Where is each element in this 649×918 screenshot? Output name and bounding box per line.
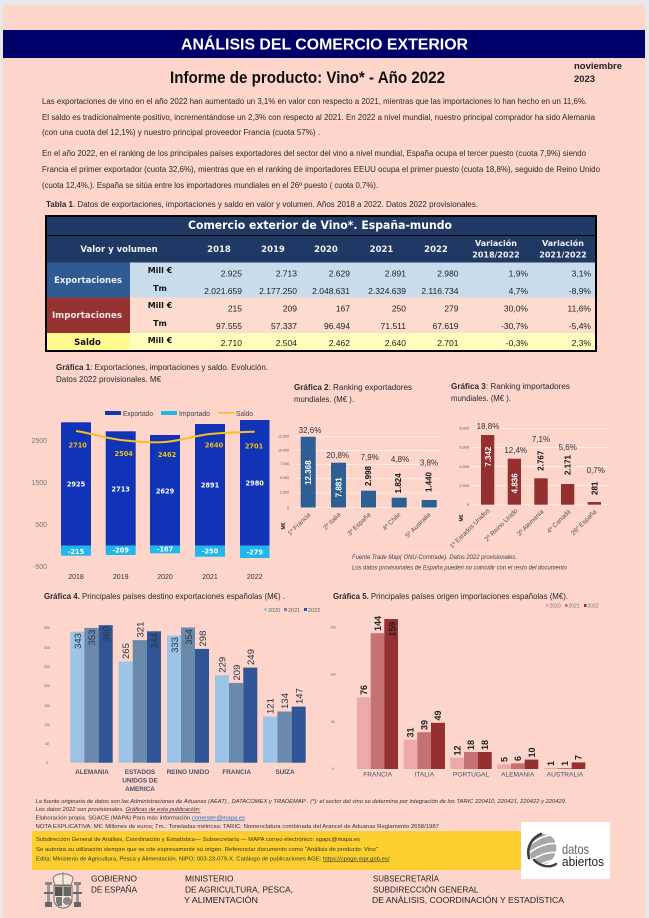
y axis: 2.500 (280, 490, 289, 494)
icon: coat of arms of Spain (44, 872, 82, 908)
value labels (359, 616, 584, 766)
y axis: 0 (467, 503, 469, 507)
value labels (73, 622, 306, 714)
y axis (44, 626, 50, 765)
y axis: 350 (44, 626, 50, 630)
value labels: 209 (232, 665, 243, 680)
category labels: ALEMANIA (75, 769, 109, 776)
table column headers: 2020 (314, 245, 338, 255)
chart 1 title (56, 363, 268, 384)
table row labels: Saldo (74, 338, 101, 348)
y axis: 4.000 (459, 465, 469, 469)
x axis years: 2021 (202, 574, 218, 581)
export labels: 2629 (156, 488, 175, 496)
legend: 2020 (268, 608, 280, 614)
footer: ministerio: DE AGRICULTURA, PESCA, (185, 884, 293, 894)
category labels (75, 769, 295, 793)
date: noviembre (574, 61, 622, 72)
legend (546, 604, 599, 610)
value labels: 134 (280, 693, 291, 709)
value labels: 7.342 (484, 446, 493, 467)
export labels: 2713 (112, 486, 130, 494)
balance labels (69, 442, 264, 459)
logo: datos abiertos (521, 822, 610, 879)
category labels: SUIZA (275, 769, 295, 776)
x axis years: 2018 (68, 574, 84, 581)
sources and notes: Elaboración propia. SGACE (MAPA) Para más información comester@mapa.es (36, 816, 245, 822)
footer: gobierno (91, 874, 137, 894)
balance labels: 2701 (245, 442, 264, 450)
y axis: 300 (44, 646, 50, 650)
footer: gobierno: GOBIERNO (91, 874, 137, 884)
y axis: 6.000 (459, 446, 469, 450)
chart 1 title: Datos 2022 provisionales. M€ (56, 375, 162, 384)
category labels: 2º Reino Unido (484, 507, 520, 543)
value labels: 343 (73, 633, 84, 649)
chart 3 title (451, 382, 570, 403)
value labels: 321 (136, 622, 146, 638)
value labels: 265 (121, 643, 132, 659)
credits box: Se autoriza su utilización siempre que se cite expresamente su origen. Referenciar documento como "Análisis de producto: Vino" (36, 847, 378, 853)
share labels: 18,8% (477, 422, 499, 431)
table values: -8,9% (569, 286, 591, 296)
category labels: UNIDOS DE (122, 778, 158, 784)
table row labels: Mill € (148, 266, 173, 275)
table column headers: 2021/2022 (539, 250, 587, 260)
intro paragraph 2: (cuota 12,4%,). España se sitúa entre los importadores mundiales en el 26º puesto ( cuota 0,7%). (42, 181, 378, 190)
value labels: 249 (246, 649, 257, 665)
y axis (278, 434, 289, 510)
legend: 2021 (568, 604, 580, 610)
bars 2022 (384, 619, 585, 769)
unit: M€ (281, 522, 287, 529)
category labels: AMERICA (125, 786, 155, 793)
share labels: 7,1% (532, 435, 550, 444)
table column headers: Variación (475, 238, 517, 248)
y axis: 0 (46, 761, 48, 765)
x axis years: 2019 (113, 574, 129, 581)
table row labels: Tm (153, 319, 167, 328)
table values: 215 (228, 304, 242, 314)
table column headers (80, 238, 587, 260)
value labels: 7.881 (334, 477, 344, 497)
table column headers: Variación (542, 238, 584, 248)
report heading: Informe de producto: Vino* - Año 2022 (170, 69, 445, 87)
balance labels: 2640 (205, 442, 224, 450)
x axis years (68, 574, 263, 581)
footer: subsecretaría: DE ANÁLISIS, COORDINACIÓN Y ESTADÍSTICA (372, 895, 564, 905)
value labels: 354 (184, 629, 195, 645)
table row labels: Tm (153, 284, 167, 293)
footer: ministerio: MINISTERIO (185, 874, 234, 884)
table values: 2.324.639 (368, 286, 406, 296)
chart 2 title: Gráfica 2: Ranking exportadores (294, 383, 412, 392)
value labels: 333 (170, 637, 181, 653)
chart 1: exports, imports and balance (31, 411, 270, 581)
table row labels (52, 266, 173, 348)
logo: datos abiertos: abiertos (562, 854, 604, 869)
table values: 2.980 (437, 268, 459, 278)
value labels: 360 (102, 626, 112, 642)
value labels (484, 446, 600, 495)
table values: 167 (336, 304, 350, 314)
x axis years: 2020 (157, 574, 173, 581)
source note: Fuente Trade Map( ONU-Comtrade). Datos 2022 provisionales. (352, 555, 517, 561)
y axis: 7.500 (280, 462, 289, 466)
y axis: 250 (44, 665, 50, 669)
table values: 96.494 (324, 321, 350, 331)
chart 1 title: Gráfica 1: Exportaciones, importaciones y saldo. Evolución. (56, 363, 268, 372)
footer: gobierno: DE ESPAÑA (91, 884, 137, 894)
intro paragraph 2 (42, 149, 601, 190)
chart 3 title: Gráfica 3: Ranking importadores (451, 382, 570, 391)
intro paragraph 2: Francia el primer exportador (cuota 32,6%), mientras que en el ranking de importadores EEUU ocupa el primer puesto (cuota 18,8%), seguido de Reino Unido (42, 165, 601, 174)
table column headers: Valor y volumen (80, 245, 158, 255)
y axis: 2.000 (459, 484, 469, 488)
table values: 2.504 (276, 338, 297, 348)
credits box: Subdirección General de Análisis, Coordinación y Estadística— Subsecretaría — MAPA correo electrónico: sgapc@mapa.es (36, 837, 360, 843)
y axis: 0 (332, 767, 334, 771)
value labels: 39 (420, 720, 430, 730)
chart 2 title (294, 383, 412, 404)
y axis: 5.000 (280, 476, 289, 480)
legend: Saldo (236, 411, 253, 418)
category labels: 4º Chile (381, 511, 403, 532)
table column headers: 2018/2022 (472, 250, 520, 260)
date: 2023 (574, 74, 595, 85)
value labels: 10 (527, 747, 537, 758)
share labels: 3,8% (420, 458, 438, 468)
table title: Comercio exterior de Vino*. España-mundo (188, 218, 452, 232)
icon: globe (525, 830, 561, 869)
table row labels: Mill € (148, 301, 173, 310)
share labels: 4,8% (391, 455, 409, 464)
value labels: 281 (590, 481, 600, 495)
table values: 4,7% (509, 286, 528, 296)
value labels: 2.767 (536, 450, 546, 471)
category labels: ALEMANIA (501, 772, 535, 778)
sources and notes: NOTA EXPLICATIVA: M€: Millones de euros; Tm.: Toneladas métricas; TARIC: Nomenclatura combinada del Arancel de Aduanas Reglamento 2658/1987 (36, 824, 439, 830)
credits box (32, 831, 522, 870)
table values: 250 (392, 304, 406, 314)
source note: Los datos provisionales de España pueden no coincidir con el resto del documento (352, 566, 568, 572)
share labels: 7,9% (361, 453, 379, 462)
chart 3: importers ranking (449, 422, 608, 550)
y axis: 150 (330, 626, 336, 630)
import labels: -167 (157, 546, 174, 554)
table: comercio exterior (45, 215, 597, 352)
export labels: 2891 (201, 482, 220, 490)
table values: 2.177.250 (259, 286, 297, 296)
y axis (330, 626, 336, 771)
table values: 2.021.659 (204, 286, 242, 296)
x axis years: 2022 (247, 574, 263, 581)
legend: 2021 (288, 608, 300, 614)
y axis: 200 (44, 684, 50, 688)
table column headers: 2021 (370, 245, 393, 255)
value labels: 298 (198, 631, 209, 646)
import labels (68, 546, 263, 556)
y axis: 2500 (31, 438, 47, 445)
chart 4: export destinations (44, 608, 320, 793)
y axis: 500 (35, 522, 47, 529)
chart 5 title: Gráfica 5. Principales países origen importaciones españolas (M€). (333, 592, 568, 601)
table values: 30,0% (504, 304, 528, 314)
footer: ministerio: Y ALIMENTACIÓN (184, 895, 258, 905)
legend: 2022 (588, 604, 599, 610)
value labels: 4.836 (510, 473, 520, 493)
value labels: 6 (513, 756, 523, 761)
footer: subsecretaría (372, 874, 564, 905)
value labels: 76 (359, 685, 369, 695)
bars 2020 (357, 697, 558, 769)
bars 2021 (371, 633, 572, 769)
category labels: 3º España (346, 511, 373, 538)
legend: 2020 (550, 604, 561, 610)
category labels: PORTUGAL (453, 772, 489, 778)
table column headers: 2018 (207, 245, 231, 255)
y axis (31, 438, 47, 571)
share labels: 5,6% (559, 443, 577, 452)
value labels: 144 (373, 616, 383, 631)
table values: 2.462 (329, 338, 350, 348)
table values (204, 268, 591, 348)
footer: subsecretaría: SUBSECRETARÍA (373, 874, 439, 884)
y axis: 0 (287, 506, 289, 510)
table values: -5,4% (569, 321, 591, 331)
value labels: 147 (294, 688, 306, 704)
value labels: 5 (500, 757, 510, 762)
value labels: 353 (87, 630, 98, 645)
category labels: AUSTRALIA (547, 772, 584, 778)
y axis (459, 426, 469, 507)
y axis: 1500 (31, 480, 47, 487)
table values: 2.701 (437, 338, 459, 348)
category labels: FRANCIA (363, 772, 393, 778)
import labels: -250 (202, 548, 219, 556)
category labels: 3º Alemania (516, 508, 546, 538)
value labels: 12 (452, 745, 462, 756)
table row labels: Exportaciones (54, 276, 122, 286)
chart 3 title: mundiales. (M€ ). (451, 394, 511, 403)
chart 5: import origins (330, 604, 599, 778)
table values: 209 (283, 304, 297, 314)
y axis: -500 (33, 564, 47, 571)
table values: 97.555 (216, 321, 242, 331)
table row labels: Mill € (148, 336, 173, 345)
bars 2022 (99, 625, 306, 763)
table values: 2.710 (221, 338, 242, 348)
category labels (363, 772, 584, 778)
category labels: 26º España (570, 508, 599, 537)
share labels (299, 426, 438, 468)
chart 2: exporters ranking (278, 426, 441, 540)
chart 4 title: Gráfica 4. Principales países destino exportaciones españolas (M€) . (44, 592, 285, 601)
share labels: 20,8% (326, 451, 349, 460)
table values: 1,9% (509, 268, 528, 278)
balance line (76, 431, 255, 442)
table column headers: 2022 (424, 245, 448, 255)
table values: -30,7% (501, 321, 528, 331)
table values: 2,3% (572, 338, 591, 348)
bars (301, 437, 437, 508)
footer: subsecretaría: SUBDIRECCIÓN GENERAL (373, 884, 479, 894)
y axis: 50 (45, 742, 49, 746)
value labels: 159 (388, 621, 398, 637)
value labels: 1 (546, 761, 556, 766)
category labels: ITALIA (414, 772, 435, 778)
value labels: 18 (466, 740, 476, 750)
value labels: 229 (218, 657, 228, 673)
value labels: 7 (574, 755, 584, 760)
category labels: 1º Estados Unidos (449, 507, 492, 550)
y axis: 8.000 (459, 426, 469, 430)
intro paragraph 1: Las exportaciones de vino en el año 2022 han aumentado un 3,1% en valor con respecto a 2021, mientras que las importaciones lo han hecho en un 11,6%. (42, 97, 587, 106)
value labels: 1 (560, 761, 570, 766)
export labels (67, 480, 264, 496)
intro paragraph 1 (42, 97, 596, 137)
category labels: FRANCIA (222, 769, 251, 776)
balance labels: 2710 (69, 442, 87, 450)
import labels: -215 (68, 548, 85, 556)
intro paragraph 2: En el año 2022, en el ranking de los principales países exportadores del sector del vino a nivel mundial, España ocupa el tercer puesto (cuota 7,9%) siendo (42, 149, 587, 158)
title banner: ANÁLISIS DEL COMERCIO EXTERIOR (181, 36, 468, 54)
share labels (477, 422, 605, 475)
bars 2021 (84, 628, 292, 763)
table values: 2.116.734 (421, 286, 459, 296)
export bars (61, 420, 270, 546)
y axis: 50 (331, 720, 335, 724)
source note (352, 555, 568, 572)
table values: 2.713 (276, 268, 297, 278)
share labels: 12,4% (504, 446, 527, 455)
legend: 2022 (308, 608, 320, 614)
export labels: 2925 (67, 480, 86, 488)
intro paragraph 1: El saldo es tradicionalmente positivo, incrementándose un 2,3% con respecto al 2021. En 2022 a nivel mundial, nuestro principal comprador ha sido Alemania (42, 113, 596, 122)
value labels: 1.440 (424, 471, 434, 492)
value labels: 121 (266, 698, 276, 714)
table values: 2.891 (385, 268, 406, 278)
unit: M€ (459, 514, 465, 521)
value labels (304, 460, 434, 497)
category labels (449, 507, 599, 550)
logo: datos abiertos: datos (562, 841, 589, 857)
legend: Exportado (123, 411, 153, 418)
category labels: 5º Australia (404, 511, 433, 540)
intro paragraph 1: (con una cuota del 12,1%) y nuestro principal proveedor Francia (cuota 57%) . (42, 128, 320, 137)
table values: 2.629 (329, 268, 350, 278)
import labels: -209 (112, 546, 129, 554)
date (574, 61, 622, 85)
share labels: 0,7% (587, 466, 605, 475)
export labels: 2980 (246, 480, 264, 488)
legend (105, 411, 253, 418)
category labels: ESTADOS (125, 769, 156, 776)
table column headers: 2019 (261, 245, 285, 255)
balance labels: 2504 (115, 450, 133, 458)
table caption: Tabla 1. Datos de exportaciones, importaciones y saldo en valor y volumen. Años 2018 a 2022. Datos 2022 provisionales. (46, 200, 478, 209)
category labels (287, 511, 433, 540)
y axis: 100 (330, 672, 336, 676)
table values: 279 (444, 304, 459, 314)
bars (481, 435, 601, 505)
category labels: REINO UNIDO (167, 769, 209, 776)
value labels: 344 (150, 633, 160, 649)
sources and notes: La fuente originaria de datos son las Administraciones de Aduanas (AEAT) , DATACOMEX y TRADEMAP . (*): el sector del vino se determina por integración de los TARIC 220410, 220421, 220422 y 220429. (36, 799, 566, 805)
value labels: 2.171 (564, 454, 572, 475)
y axis: 100 (44, 723, 50, 727)
balance labels: 2462 (158, 451, 177, 459)
credits box: Edita: Ministerio de Agricultura, Pesca y Alimentación. NIPO: 003-23-079-X. Catálogo de publicaciones AGE: https://cpage.mpr.gob.es/ (36, 856, 390, 862)
footer: ministerio (184, 874, 293, 905)
table values: -0,3% (506, 338, 528, 348)
y axis: 10.000 (278, 448, 289, 452)
category labels: 4º Canadá (546, 508, 573, 535)
table values: 67.619 (432, 321, 459, 331)
import labels: -279 (246, 548, 263, 556)
value labels: 18 (480, 740, 490, 750)
sources and notes (36, 799, 566, 830)
table values: 2.925 (221, 268, 242, 278)
title banner (3, 30, 645, 58)
table values: 2.640 (385, 338, 406, 348)
value labels: 12.368 (304, 460, 313, 485)
value labels: 2.998 (364, 465, 373, 486)
table values: 3,1% (572, 268, 591, 278)
y axis: 150 (44, 704, 50, 708)
legend (264, 608, 320, 614)
import bars (61, 546, 270, 558)
table values: 2.048.631 (312, 286, 350, 296)
table row labels: Importaciones (52, 311, 122, 321)
value labels: 49 (433, 710, 443, 720)
legend: Importado (179, 411, 210, 418)
category labels: 2º Italia (322, 511, 343, 532)
category labels: 1º Francia (287, 511, 313, 537)
table values: 11,6% (568, 304, 591, 314)
bars 2020 (70, 632, 277, 763)
table values: 57.337 (271, 321, 297, 331)
value labels: 31 (406, 727, 416, 738)
sources and notes: Los datos 2022 son provisionales. Gráficas de esta publicación: (36, 807, 201, 813)
table values: 71.511 (381, 321, 406, 331)
share labels: 32,6% (299, 426, 321, 435)
value labels: 1.824 (394, 473, 403, 493)
y axis: 12.500 (278, 434, 289, 438)
chart 2 title: mundiales. (M€ ). (294, 395, 354, 404)
